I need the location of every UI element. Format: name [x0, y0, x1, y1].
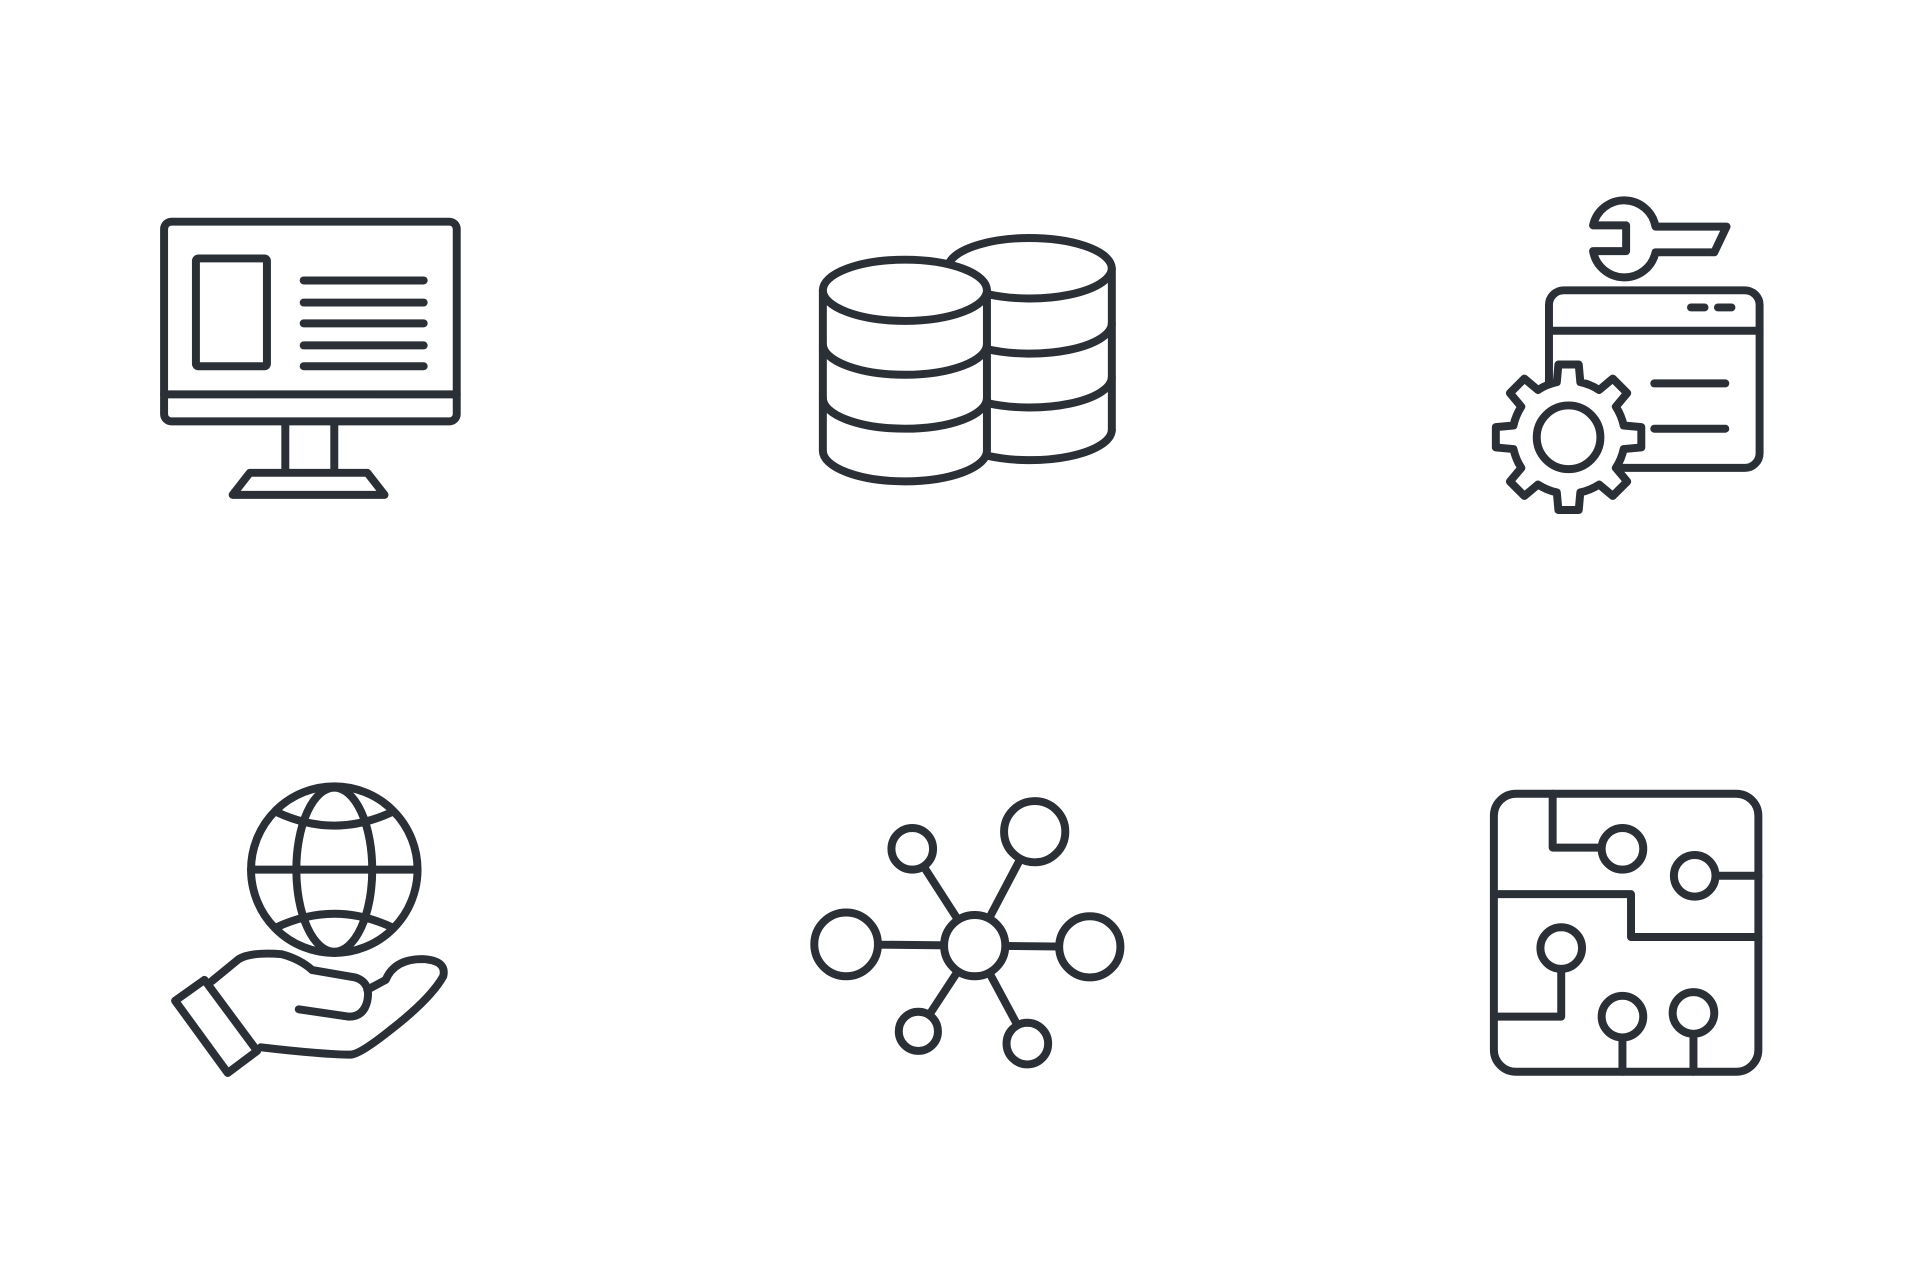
- icon: desktop monitor: [164, 222, 457, 495]
- icon: globe in hand: [175, 786, 444, 1073]
- icon: browser settings with gear and wrench: [1496, 200, 1760, 510]
- icon: database cylinders: [823, 238, 1112, 481]
- icon: network hub: [814, 801, 1120, 1064]
- icon: circuit board: [1494, 794, 1758, 1072]
